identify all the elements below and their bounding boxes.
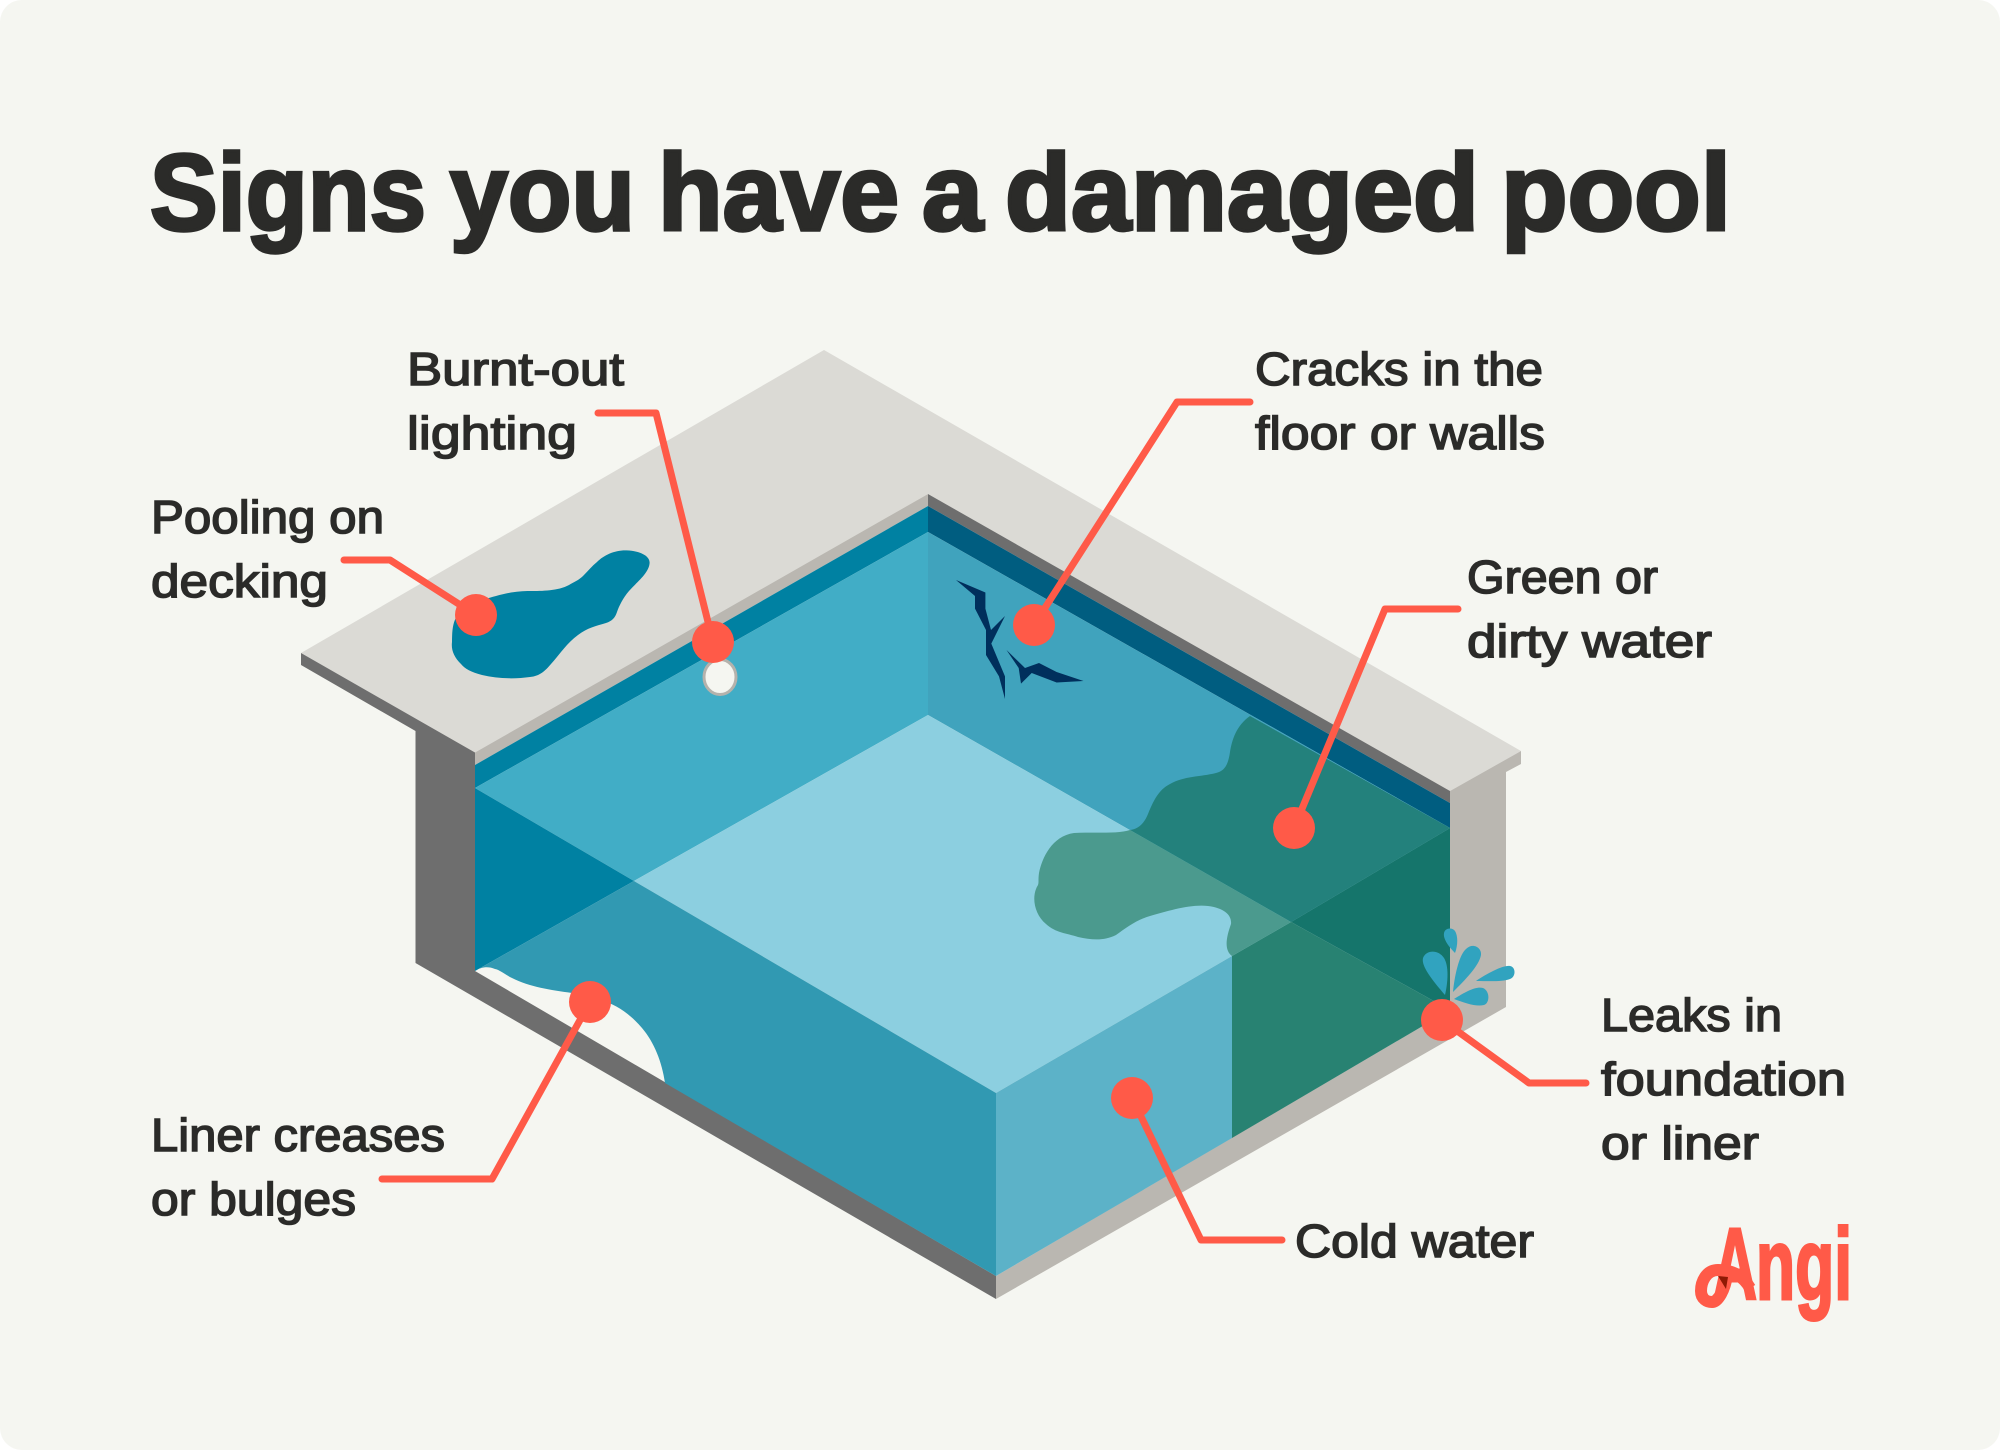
callout: liner creases or bulges: Liner creases	[151, 1109, 445, 1161]
back left pool wall	[475, 532, 928, 881]
callout: green or dirty water: Green or	[1467, 551, 1658, 603]
green algae on wall	[1130, 716, 1450, 922]
pool light	[704, 660, 736, 694]
logo: Angi: ngi	[1756, 1209, 1852, 1321]
green water in corner	[1291, 828, 1450, 1010]
callout: pooling on decking	[151, 491, 497, 636]
back right pool wall	[928, 532, 1450, 922]
puddle on decking	[452, 550, 650, 678]
pool illustration	[301, 350, 1521, 1299]
title: you	[450, 132, 635, 254]
title: have	[658, 132, 899, 254]
callout: liner creases or bulges: or bulges	[151, 1173, 356, 1225]
callout: pooling on decking: decking	[151, 555, 328, 607]
title	[150, 132, 1731, 254]
logo: Angi	[1701, 1209, 1852, 1321]
front right water face	[996, 956, 1232, 1276]
callout: cold water: Cold water	[1295, 1215, 1534, 1267]
title: Signs	[150, 132, 426, 254]
inner rim right	[928, 494, 1450, 803]
callout: cracks in the floor or walls: Cracks in the	[1255, 343, 1543, 395]
callout: leaks in foundation or liner: or liner	[1601, 1117, 1759, 1169]
callout: leaks in foundation or liner: foundation	[1601, 1053, 1846, 1105]
title: pool	[1501, 132, 1731, 254]
right outer wall	[996, 751, 1521, 1299]
callout: pooling on decking: Pooling on	[151, 491, 384, 543]
pool deck top	[301, 350, 1521, 791]
callout: cracks in the floor or walls: floor or walls	[1255, 407, 1545, 459]
callout: leaks in foundation or liner: Leaks in	[1601, 989, 1782, 1041]
title: a	[922, 132, 984, 254]
front left water face with liner bulge	[475, 881, 996, 1276]
waterline band left	[475, 506, 928, 788]
pool floor	[634, 715, 1291, 1093]
left outer wall	[301, 653, 996, 1299]
callout: cold water	[1111, 1077, 1534, 1267]
callout: burnt-out lighting: Burnt-out	[407, 343, 624, 395]
callout: burnt-out lighting: lighting	[407, 407, 577, 459]
green algae on floor	[1034, 830, 1291, 956]
logo: Angi: A	[1713, 1209, 1757, 1321]
callout: burnt-out lighting	[407, 343, 734, 663]
title: damaged	[1005, 132, 1479, 254]
callout: cracks in the floor or walls	[1013, 343, 1545, 646]
left end wall	[475, 788, 634, 971]
callout: liner creases or bulges	[151, 981, 611, 1225]
callout: green or dirty water	[1273, 551, 1712, 849]
icon: cracks	[956, 580, 1084, 699]
green water on front face	[1232, 922, 1450, 1138]
callout: leaks in foundation or liner	[1421, 989, 1846, 1169]
inner rim left	[475, 494, 928, 765]
icon: water splash leak	[1423, 929, 1514, 1006]
callout: green or dirty water: dirty water	[1467, 615, 1712, 667]
waterline band right	[928, 506, 1450, 828]
